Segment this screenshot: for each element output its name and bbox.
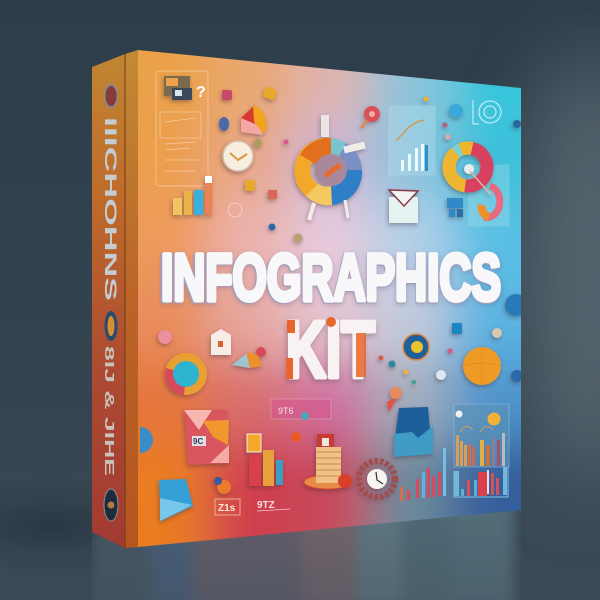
icon: pin (361, 106, 380, 128)
title: KIT (284, 305, 375, 397)
chart card bottom right bars (454, 467, 508, 497)
icon: house tag (211, 329, 231, 355)
panel: UI cards top left (156, 71, 208, 186)
spine subtitle: 8IJ & JIHE (102, 346, 117, 477)
icon: target circle (473, 100, 501, 124)
box shadow (0, 510, 112, 542)
icon: small bar chart (173, 176, 212, 215)
box front cover (138, 50, 521, 547)
gear badge center right (403, 334, 429, 360)
text: 9C: 9C (193, 437, 203, 446)
label: Z box: Z1s (218, 503, 236, 514)
chart card bottom right top (454, 404, 509, 467)
icon: pink ball (158, 330, 172, 344)
dots top right (424, 96, 521, 140)
spine title: IIICHOHNS (101, 117, 120, 301)
icon: outlined circle (228, 203, 242, 217)
ring chart right (444, 143, 492, 195)
icon: blue envelope card (394, 407, 433, 457)
line and bar chart card (389, 106, 435, 175)
coin stack icon (304, 434, 352, 489)
icon: magenta label card (271, 399, 331, 420)
icon: folded square tile (184, 410, 229, 465)
title: KIT: KIT (284, 308, 375, 397)
icon: blue globe gear (165, 353, 207, 395)
icon: clock (223, 141, 253, 171)
orange globe (463, 347, 501, 385)
icon: origami bird (232, 347, 266, 368)
spine emblem middle (104, 311, 118, 341)
icon: pie chart (241, 105, 267, 135)
icon: blue origami folder (159, 479, 193, 521)
icon: colored document bars (247, 434, 283, 486)
donut chart center (294, 115, 365, 220)
floor reflection (92, 500, 514, 600)
icon: question mark: ? (196, 84, 206, 101)
spine emblem bottom (104, 489, 118, 521)
small ring card (469, 165, 509, 226)
spine emblem top (104, 84, 118, 108)
bar chart bottom center (400, 448, 446, 501)
cover gradient (138, 50, 521, 547)
icon: orange dot (291, 432, 301, 442)
clock with colored ticks (359, 461, 395, 497)
icon: coral cone (387, 387, 402, 412)
icon: envelope (389, 190, 418, 223)
label: 9TZ: 9TZ (257, 500, 275, 511)
label: 9TZ (257, 500, 290, 511)
title: KIT: KIT (286, 305, 375, 394)
icon: small orange sphere (214, 477, 231, 494)
label: Z box (215, 499, 240, 515)
icon: magenta label card: 9T6 (278, 406, 294, 416)
icon: cyan badge (449, 104, 463, 118)
icons: floating cubes and dots (219, 86, 302, 242)
icon: blue half circle (140, 427, 153, 453)
icon: monitor (164, 76, 192, 100)
icon: puzzle block (447, 198, 463, 217)
box spine (92, 50, 138, 548)
small dots right (378, 294, 527, 384)
